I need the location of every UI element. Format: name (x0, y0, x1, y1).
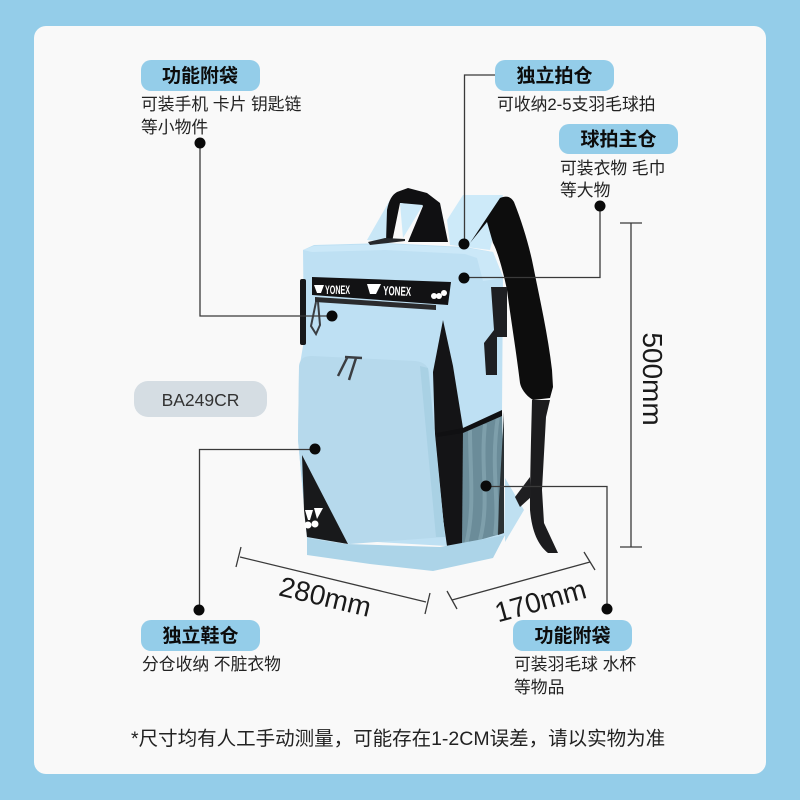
front pocket (298, 356, 445, 544)
YONEX logo 1: YONEX (325, 283, 350, 297)
leader line: shoe compartment (194, 444, 320, 616)
dimension: height 500mm: 500mm (637, 332, 668, 426)
leader line: mesh pocket (480, 480, 612, 614)
model number tag: BA249CR (162, 390, 239, 410)
callout: main compartment (559, 124, 678, 200)
callout: racket compartment: 独立拍仓 (516, 64, 593, 87)
callout: top left accessory pocket: 功能附袋 (162, 65, 238, 87)
right side clip (484, 287, 507, 375)
dimension: depth 170mm (447, 552, 595, 628)
logo mark 3 (431, 290, 447, 299)
callout: mesh pocket: 等物品 (514, 678, 564, 697)
YONEX logo 2: YONEX (383, 283, 412, 299)
dimension: depth 170mm: 170mm (491, 573, 590, 628)
callout: mesh pocket (513, 620, 636, 697)
callout: top left accessory pocket (141, 60, 302, 137)
leader line: side pocket (194, 138, 338, 322)
callout: main compartment: 等大物 (560, 181, 610, 200)
handle side gusset (367, 200, 390, 242)
callout: racket compartment (495, 60, 656, 114)
callout: shoe compartment: 独立鞋仓 (162, 624, 239, 647)
callout: racket compartment: 可收纳2-5支羽毛球拍 (497, 95, 656, 114)
lower webbing strap (530, 400, 558, 553)
callout: top left accessory pocket: 等小物件 (141, 118, 208, 137)
lower side wing (505, 478, 524, 542)
triangle logo mark (304, 508, 323, 528)
backpack illustration (298, 188, 558, 571)
callout: mesh pocket: 可装羽毛球 水杯 (514, 655, 636, 674)
leader line: main compartment (458, 200, 606, 284)
callout: main compartment: 可装衣物 毛巾 (560, 159, 665, 178)
mesh pocket binding (437, 410, 502, 437)
black logo band (312, 277, 451, 305)
bottom band (307, 535, 505, 571)
black triangle (302, 455, 348, 544)
handle opening (400, 203, 423, 238)
model number tag (134, 381, 267, 417)
logo mark 2 (367, 284, 381, 294)
callout: shoe compartment (141, 620, 281, 674)
footnote: *尺寸均有人工手动测量，可能存在1-2CM误差，请以实物为准 (131, 728, 665, 750)
top flap (303, 244, 503, 281)
shoulder strap (470, 197, 553, 400)
pocket zipper pulls (338, 357, 362, 380)
callout: top left accessory pocket: 可装手机 卡片 钥匙链 (141, 95, 302, 114)
top pocket zipper (315, 297, 436, 310)
side mesh pocket (462, 412, 504, 545)
black side wedge (433, 320, 463, 546)
top handle (386, 188, 448, 242)
callout: main compartment: 球拍主仓 (580, 128, 657, 150)
lower strap connector (515, 477, 531, 507)
leader line: racket compartment (458, 69, 506, 250)
logo mark 1 (314, 285, 324, 293)
main body (298, 243, 505, 546)
zipper pull (311, 302, 320, 334)
back pad (447, 195, 503, 250)
dimension: height 500mm (620, 223, 668, 547)
dimension: width 280mm (236, 547, 430, 623)
dimension: width 280mm: 280mm (276, 571, 374, 623)
callout: mesh pocket: 功能附袋 (534, 625, 611, 647)
left side buckle (300, 279, 306, 345)
mesh highlights (466, 416, 498, 545)
callout: shoe compartment: 分仓收纳 不脏衣物 (142, 655, 281, 674)
top zipper pulls (368, 238, 405, 245)
